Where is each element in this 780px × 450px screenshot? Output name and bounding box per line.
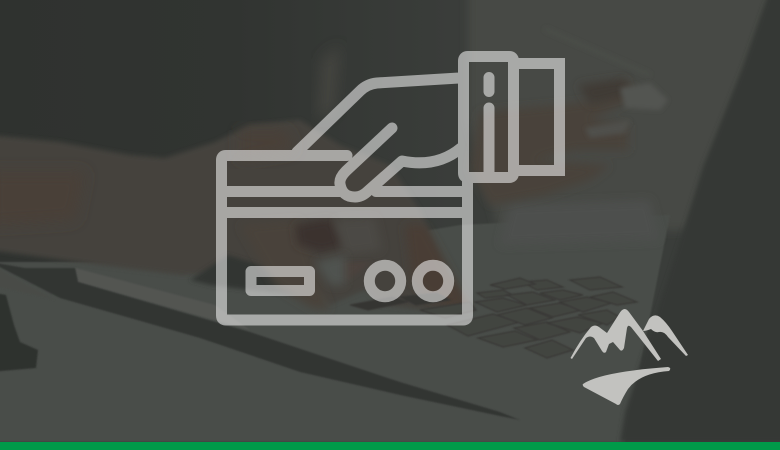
icon: hand swiping credit card: [222, 56, 560, 320]
faint card edge: [545, 29, 650, 75]
far hand holding card: [470, 80, 640, 205]
arm warm patch: [0, 172, 85, 225]
knuckle warm patch: [240, 130, 295, 160]
shadow under hand: [190, 255, 300, 295]
screen glow upper right: [468, 0, 780, 235]
finger shapes: [240, 220, 330, 310]
laptop lip: [75, 268, 250, 330]
right laptop body dark: [620, 0, 780, 442]
faint highlight: [318, 45, 340, 120]
forearm: [0, 120, 470, 312]
logo swoosh: [583, 367, 670, 405]
deck bright patch: [500, 200, 660, 245]
logo: mountains and swoosh: [570, 309, 688, 405]
left wedge: [0, 264, 55, 300]
dark object left: [0, 292, 38, 372]
laptop deck: [0, 215, 670, 442]
logo mountains: [570, 309, 688, 361]
dark laptop edge strip: [0, 262, 520, 420]
green footer bar: [0, 442, 780, 450]
keyboard keys: [350, 277, 637, 358]
